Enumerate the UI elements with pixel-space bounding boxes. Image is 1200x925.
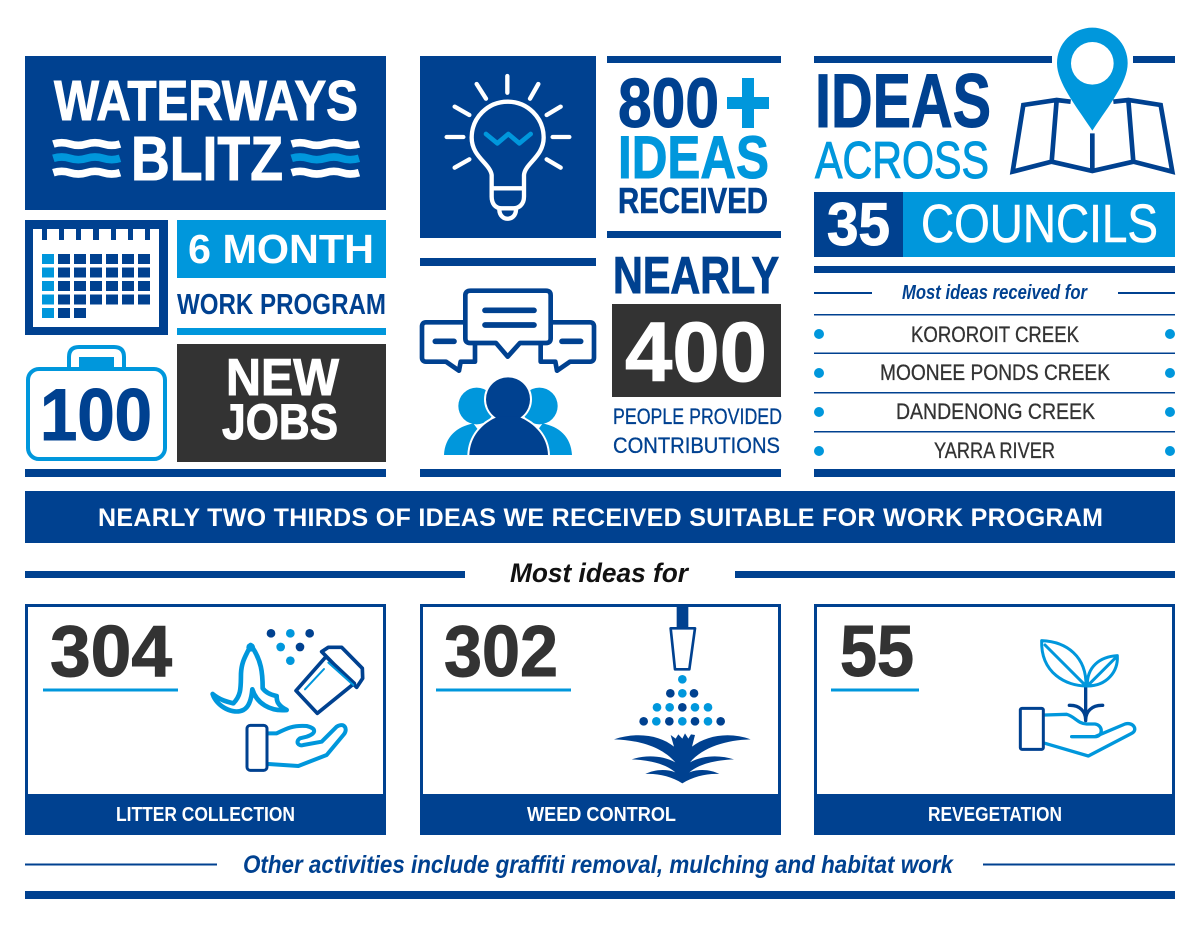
banner: nearly two thirds suitable: NEARLY TWO THIRDS OF IDEAS WE RECEIVED SUITABLE FOR WORK PROGRAM: [98, 504, 1103, 532]
panel: left column, programme overview: [25, 56, 386, 477]
title block: Waterways Blitz: [25, 56, 386, 210]
text: work program: WORK PROGRAM: [177, 289, 386, 321]
list: top waterways: DANDENONG CREEK: [896, 399, 1095, 424]
list: top waterways: MOONEE PONDS CREEK: [880, 360, 1110, 385]
panel: right column, councils and waterways: [814, 28, 1175, 477]
label: litter collection: LITTER COLLECTION: [116, 804, 295, 826]
icon: light bulb: [420, 56, 596, 238]
stat: 304: 304: [50, 612, 172, 692]
icon: spray nozzle over weed: [614, 604, 751, 783]
list: top waterways: YARRA RIVER: [934, 438, 1055, 463]
list: top waterways: [814, 314, 1175, 463]
stat: 55: 55: [840, 612, 914, 692]
heading: most ideas for: [25, 558, 1175, 588]
stat: nearly 400 people: [612, 247, 782, 458]
icon: speech bubbles and people: [422, 291, 594, 455]
subheading: most ideas received for: Most ideas received for: [902, 282, 1088, 304]
title block: Waterways Blitz: BLITZ: [131, 125, 283, 194]
label: revegetation: REVEGETATION: [928, 804, 1062, 826]
callout: 35 councils: 35: [827, 191, 890, 258]
icon: water waves: [53, 143, 359, 174]
callout: 6 month: 6 MONTH: [188, 226, 374, 272]
icon: briefcase with 100: 100: [40, 375, 152, 456]
heading: ideas across: IDEAS: [815, 59, 991, 144]
panel: litter collection: [25, 606, 386, 835]
stat: 800+ ideas received: IDEAS: [618, 124, 769, 191]
icon: seedling in hand: [1020, 641, 1135, 756]
callout: 35 councils: COUNCILS: [921, 194, 1158, 254]
footnote: other activities: Other activities include graffiti removal, mulching and habitat work: [243, 851, 954, 879]
stat: nearly 400 people: NEARLY: [613, 247, 779, 305]
stat: nearly 400 people: CONTRIBUTIONS: [613, 433, 780, 458]
panel: weed control: [420, 604, 781, 835]
callout: new jobs: NEW: [226, 349, 340, 407]
stat: 800+ ideas received: 800: [618, 64, 719, 142]
callout: new jobs: [177, 344, 386, 462]
icon: calendar: [25, 220, 168, 335]
icon: plus sign: [727, 78, 769, 128]
label: weed control: WEED CONTROL: [527, 804, 676, 826]
heading: most ideas for: Most ideas for: [510, 558, 689, 588]
heading: ideas across: ACROSS: [815, 132, 989, 190]
icon: litter over hand: [213, 629, 363, 770]
callout: 35 councils: [814, 191, 1175, 258]
callout: new jobs: JOBS: [222, 394, 338, 450]
panel: revegetation: [814, 606, 1175, 835]
panel: middle column, ideas and people: [420, 56, 782, 477]
stat: 800+ ideas received: RECEIVED: [618, 180, 768, 221]
banner: nearly two thirds suitable: [25, 491, 1175, 543]
stat: nearly 400 people: PEOPLE PROVIDED: [613, 404, 782, 429]
stat: 800+ ideas received: [607, 56, 781, 238]
stat: 302: 302: [444, 612, 558, 692]
title block: Waterways Blitz: WATERWAYS: [54, 69, 358, 133]
icon: map with location pin: [1013, 28, 1172, 172]
heading: ideas across: [815, 59, 991, 190]
stat: nearly 400 people: 400: [625, 305, 767, 399]
list: top waterways: KOROROIT CREEK: [911, 322, 1079, 347]
icon: briefcase with 100: [28, 347, 165, 459]
